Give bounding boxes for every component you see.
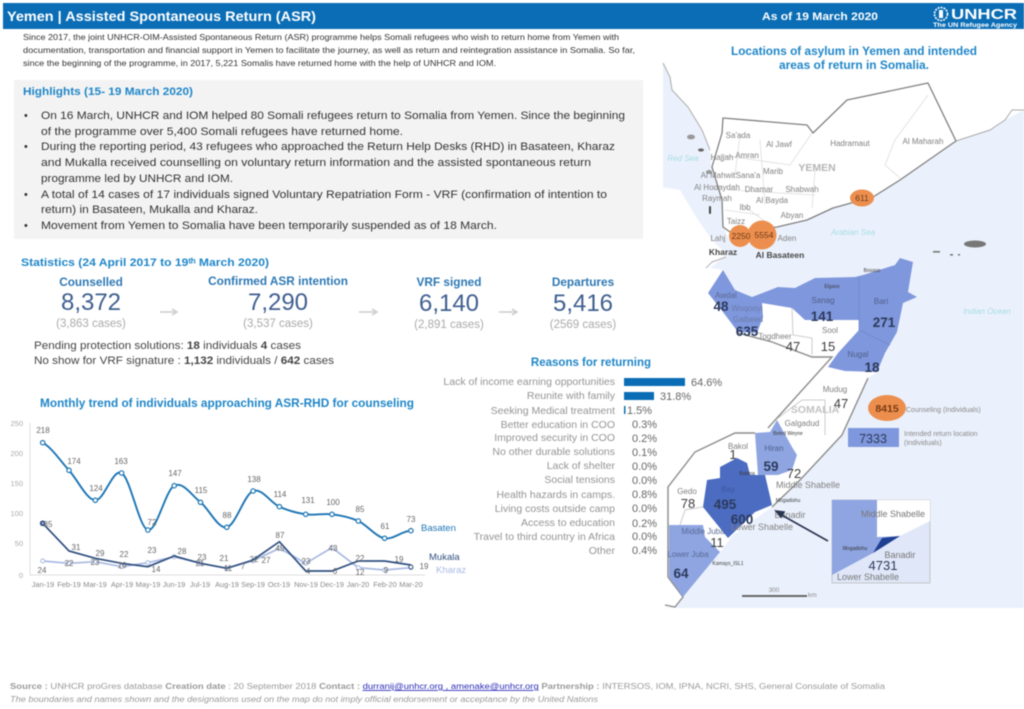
return counts: blue regions: [673, 299, 896, 581]
highlights bullets: return) in Basateen, Mukalla and Kharaz.: [41, 204, 258, 216]
chart title: Monthly trend of individuals approaching ASR-RHD for counseling: [40, 398, 414, 410]
bubble values: 5554: [755, 230, 774, 240]
small town labels: Bosaso: [864, 268, 881, 274]
data labels: 24: [38, 566, 47, 575]
Somalia labels: Sool: [822, 326, 838, 335]
reason labels: Living costs outside camp: [495, 503, 615, 515]
stat: counselled: 8,372: [61, 289, 121, 316]
title: Yemen | Assisted Spontaneous Return (ASR): [7, 8, 316, 24]
y axis labels: [10, 419, 23, 580]
data labels: 11: [224, 564, 233, 573]
data labels: 23: [148, 546, 157, 555]
percentage values: 0.0%: [632, 531, 657, 543]
intro paragraph: since the beginning of the programme, in 2017, 5,221 Somalis have returned home with the help of UNHCR and IOM.: [23, 58, 496, 68]
small town labels: Baidoa: [739, 471, 755, 477]
percentage values: [627, 377, 722, 557]
sea labels: [667, 154, 1011, 316]
x axis labels: Jun-19: [163, 580, 185, 589]
Yemen outline: [712, 83, 956, 232]
scale bar: 300: [769, 587, 780, 594]
data labels: 85: [44, 520, 53, 529]
return counts: blue regions: 271: [873, 315, 896, 330]
pending and no-show notes: Pending protection solutions: 18 individuals 4 cases: [34, 340, 302, 352]
stat: confirmed ASR intention: (3,537 cases): [243, 318, 313, 330]
map legend: (Individuals): [904, 440, 942, 447]
highlights bullets: and Mukalla received counselling on voluntary return information and the assisted spontaneous return: [41, 157, 591, 169]
data labels: 29: [96, 549, 105, 558]
UNHCR logo: UNHCR: [951, 6, 1017, 23]
Yemen labels: Abyan: [781, 211, 803, 220]
scale bar: [742, 587, 817, 599]
x axis labels: Jan-20: [347, 580, 369, 589]
return counts: blue regions: 48: [713, 299, 729, 314]
data labels: 21: [220, 554, 229, 563]
series labels: [421, 523, 466, 576]
highlights heading: Highlights (15- 19 March 2020): [23, 86, 193, 98]
statistics heading: Statistics (24 April 2017 to 19ᵗʰ March 2020): [21, 257, 269, 269]
bubble values: 2250: [732, 231, 751, 241]
small town labels: Elgavo: [824, 284, 840, 290]
Somalia labels: Hiran: [764, 444, 784, 453]
Yemen labels: Taizz: [727, 217, 745, 226]
stat: VRF signed: [414, 275, 484, 331]
data labels: 124: [89, 484, 103, 493]
Somalia labels: Lower Shabelle: [731, 522, 793, 532]
reason labels: Access to education: [521, 517, 615, 529]
Yemen labels: Aden: [778, 234, 796, 243]
stat: departures: (2569 cases): [550, 319, 616, 331]
Gulf islands: [933, 240, 986, 256]
data labels: 9: [384, 566, 389, 575]
map title: Locations of asylum in Yemen and intended: [731, 46, 977, 58]
return counts: white regions: 78: [681, 496, 695, 511]
Yemen labels: Shabwah: [785, 185, 819, 194]
reason labels: No other durable solutions: [492, 446, 615, 458]
highlights bullets: programme led by UNHCR and IOM.: [41, 173, 233, 185]
data labels: 6: [333, 567, 338, 576]
y axis labels: 150: [10, 479, 23, 488]
Somalia labels: Lower Juba: [667, 550, 709, 559]
Yemen labels: Al Jawf: [766, 140, 793, 149]
data labels: 87: [276, 531, 285, 540]
Somalia labels: Awdal: [715, 291, 737, 300]
line chart: monthly trend: [10, 398, 466, 589]
map legend: 7333: [859, 432, 887, 446]
Yemen labels: Sana'a: [736, 171, 761, 180]
Red Sea islands: [687, 134, 712, 214]
Yemen labels: Hadramaut: [830, 139, 871, 148]
bubble values: [732, 193, 869, 241]
Somalia white regions outline: [665, 333, 868, 607]
asylum place names: Kharaz: [709, 247, 737, 257]
return counts: blue regions: 495: [714, 497, 737, 512]
data labels: 14: [152, 565, 161, 574]
asylum place names: [709, 247, 804, 260]
percentage values: 0.2%: [632, 518, 657, 530]
percentage values: 0.2%: [632, 433, 657, 445]
scale bar: km: [808, 592, 817, 599]
inset: Mogadishu and Banadir: Banadir: [884, 550, 916, 560]
reason labels: Reunite with family: [527, 390, 616, 402]
highlights bullets: •: [24, 110, 28, 122]
data labels: 22: [120, 550, 129, 559]
x axis labels: [32, 580, 423, 589]
stat: counselled: Counselled: [59, 275, 123, 289]
y axis labels: 0: [19, 571, 23, 580]
data labels: 22: [65, 559, 74, 568]
inset arrow: [776, 511, 828, 541]
percentage values: 0.1%: [632, 447, 657, 459]
Somalia labels: Galbeed: [733, 315, 763, 324]
Yemen labels: Sa'ada: [726, 131, 751, 140]
stat: departures: [550, 275, 616, 331]
highlights bullets: A total of 14 cases of 17 individuals signed Voluntary Repatriation Form - VRF (confirmation of intention to: [41, 189, 607, 201]
stat: confirmed ASR intention: 7,290: [248, 289, 308, 316]
data labels: [36, 426, 429, 577]
data labels: 16: [118, 561, 127, 570]
reason labels: Lack of income earning opportunities: [443, 376, 615, 388]
intended areas: Hiran: [755, 420, 797, 475]
Yemen labels: Dhamar: [745, 185, 774, 194]
data labels: 147: [168, 469, 182, 478]
reason labels: Better education in COO: [501, 419, 615, 431]
data labels: 19: [420, 562, 429, 571]
asylum place names: Al Basateen: [756, 250, 804, 260]
map legend: Intended return location: [904, 431, 978, 438]
Yemen labels: Marib: [763, 167, 784, 176]
reason labels: Travel to third country in Africa: [474, 531, 615, 543]
return counts: blue regions: 600: [731, 512, 753, 527]
data labels: 22: [356, 554, 365, 563]
sea labels: Red Sea: [667, 154, 699, 163]
percentage values: 0.8%: [632, 489, 657, 501]
data labels: 174: [67, 457, 81, 466]
data labels: 163: [114, 457, 128, 466]
return counts: white regions: 11: [710, 535, 724, 550]
x axis labels: Apr-19: [111, 580, 133, 589]
pending and no-show notes: No show for VRF signature : 1,132 individuals / 642 cases: [34, 355, 335, 367]
return counts: blue regions: 59: [763, 459, 779, 474]
Yemen labels: Ibb: [739, 203, 751, 212]
percentage values: 0.0%: [632, 461, 657, 473]
Somalia labels: Sanag: [811, 296, 835, 305]
highlights bullets: •: [24, 189, 28, 201]
Somalia labels: Middle Juba: [681, 527, 725, 536]
highlights bullets: •: [24, 141, 28, 153]
Somalia labels: Middle Shabelle: [776, 480, 840, 490]
inset: Mogadishu and Banadir: 4731: [869, 558, 897, 573]
data labels: 100: [326, 498, 340, 507]
UNHCR logo: The UN Refugee Agency: [933, 22, 1017, 29]
data labels: 22: [250, 555, 259, 564]
return counts: blue regions: 141: [811, 309, 834, 324]
Somalia labels: Bari: [874, 297, 888, 306]
Somalia labels: Galgadud: [785, 419, 819, 428]
Yemen labels: Lahj: [710, 234, 726, 243]
y axis labels: 200: [10, 449, 23, 458]
intended areas: Bay and Lower Shabelle: [703, 458, 772, 538]
data labels: 23: [91, 558, 100, 567]
map: Yemen and Somalia: [655, 40, 1024, 608]
Somalia internal light borders: [680, 308, 825, 525]
Yemen labels: YEMEN: [798, 162, 836, 174]
intro paragraph: Since 2017, the joint UNHCR-OIM-Assisted Spontaneous Return (ASR) programme helps Somali refugees who wish to return home from Yemen with: [23, 32, 619, 42]
return counts: white regions: 15: [821, 339, 835, 354]
percentage values: 64.6%: [691, 377, 722, 389]
reason labels: Seeking Medical treatment: [491, 405, 615, 417]
reason labels: [443, 376, 616, 557]
data labels: 138: [247, 475, 261, 484]
stat: VRF signed: VRF signed: [417, 275, 481, 289]
reason labels: Improved security in COO: [494, 432, 615, 444]
Somalia labels: Togdheer: [758, 332, 792, 341]
x axis labels: Jan-19: [32, 580, 54, 589]
return counts: blue regions: 635: [736, 324, 759, 339]
x axis labels: Jul-19: [190, 580, 210, 589]
Arabian land: [655, 40, 1024, 240]
UNHCR logo: [933, 6, 1017, 29]
percentage values: 0.3%: [632, 419, 657, 431]
percentage values: 31.8%: [660, 391, 691, 403]
map title: [731, 46, 977, 72]
map legend: Counseling (Individuals): [906, 407, 981, 414]
bar chart: reasons for returning: [443, 357, 722, 557]
percentage values: 1.5%: [627, 405, 652, 417]
arrow: [160, 309, 177, 315]
stat: confirmed ASR intention: [208, 274, 348, 330]
Yemen labels: Al Bayda: [756, 196, 789, 205]
series labels: Kharaz: [436, 565, 466, 576]
bars: [624, 378, 685, 414]
Somalia labels: Mudug: [823, 385, 847, 394]
Somalia labels: Nugal: [848, 350, 869, 359]
asylum bubbles: [729, 190, 874, 250]
map legend: 8415: [875, 403, 899, 415]
highlights bullets: During the reporting period, 43 refugees who approached the Return Help Desks (RHD) in Basateen, Kharaz: [41, 141, 615, 153]
x axis labels: May-19: [136, 580, 160, 589]
map legend: [848, 395, 981, 447]
data labels: 31: [72, 543, 81, 552]
x axis labels: Feb-20: [373, 580, 397, 589]
x axis labels: Mar-19: [83, 580, 107, 589]
disclaimer: The boundaries and names shown and the designations used on the map do not imply official endorsement or acceptance by the United Nations: [10, 694, 599, 704]
highlights bullets: On 16 March, UNHCR and IOM helped 80 Somali refugees return to Somalia from Yemen. Since the beginning: [41, 110, 625, 122]
reason labels: Other: [589, 545, 615, 557]
reason labels: Social tensions: [544, 474, 615, 486]
bar chart title: Reasons for returning: [531, 357, 651, 369]
return counts: blue regions: 64: [673, 566, 689, 581]
Somalia labels: [667, 291, 888, 559]
data labels: 131: [301, 496, 315, 505]
stat: departures: 5,416: [553, 290, 613, 317]
panel: statistics: [21, 257, 616, 367]
data labels: 45: [276, 544, 285, 553]
highlights bullets: •: [24, 220, 28, 232]
x axis labels: Mar-20: [399, 580, 423, 589]
panel: highlights: [14, 80, 643, 239]
x axis labels: Aug-19: [215, 580, 239, 589]
stat: confirmed ASR intention: Confirmed ASR intention: [208, 274, 348, 288]
data labels: 85: [356, 505, 365, 514]
return counts: white regions: 72: [787, 466, 801, 481]
y axis labels: 100: [10, 509, 23, 518]
intro paragraph: documentation, transportation and financial support in Yemen to facilitate the journey, as well as return and reintegration assistance in Somalia. So far,: [23, 45, 635, 55]
series labels: Basaten: [421, 523, 456, 534]
stat: VRF signed: (2,891 cases): [414, 319, 484, 331]
data labels: 7: [241, 562, 246, 571]
data labels: 23: [198, 553, 207, 562]
report date: As of 19 March 2020: [762, 11, 878, 23]
Yemen labels: [694, 131, 943, 243]
highlights bullets: of the programme over 5,400 Somali refugees have returned home.: [41, 126, 403, 138]
Somalia labels: SOMALIA: [791, 404, 840, 416]
data labels: 43: [329, 544, 338, 553]
sea labels: Arabian Sea: [830, 228, 876, 237]
data labels: 12: [356, 568, 365, 577]
inset: Mogadishu and Banadir: Lower Shabelle: [837, 572, 899, 582]
Yemen labels: Al Maharah: [903, 137, 943, 146]
data labels: 4: [306, 567, 311, 576]
data labels: 21: [196, 559, 205, 568]
y axis labels: 250: [10, 419, 23, 428]
Somalia labels: Woqooyi: [732, 304, 763, 313]
header bar: [3, 3, 1024, 29]
inset: Mogadishu and Banadir: Mogadishu: [843, 546, 867, 552]
x axis labels: Sep-19: [241, 580, 265, 589]
intended areas: Lower Juba: [669, 525, 720, 597]
data labels: 114: [274, 490, 287, 499]
arrow: [359, 309, 377, 315]
series: Basateen: [40, 440, 413, 540]
series: Mukalla: [41, 521, 413, 571]
Djibouti stroke: [706, 257, 726, 268]
data labels: 73: [407, 515, 416, 524]
map title: areas of return in Somalia.: [779, 60, 929, 72]
data labels: 115: [195, 486, 208, 495]
return counts: white regions: 1: [729, 447, 737, 462]
Somalia labels: Bakol: [728, 442, 748, 451]
percentage values: 0.4%: [632, 545, 657, 557]
Yemen labels: Al Hodaydah: [694, 183, 740, 192]
y axis labels: 50: [15, 539, 23, 548]
African land: [655, 186, 917, 608]
Somalia labels: Bay: [721, 485, 735, 494]
Yemen labels: Amran: [735, 151, 759, 160]
data labels: 61: [381, 522, 390, 531]
return counts: blue regions: 18: [864, 360, 880, 375]
Yemen labels: Al Mahwit: [701, 171, 736, 180]
inset: Mogadishu and Banadir: [832, 500, 930, 583]
Yemen labels: Hajjah: [711, 153, 733, 162]
x axis labels: Feb-19: [57, 580, 81, 589]
return counts: white regions: 47: [834, 396, 848, 411]
stat: departures: Departures: [552, 275, 615, 289]
footer: [10, 681, 885, 704]
reason labels: Lack of shelter: [547, 460, 615, 472]
data labels: 72: [148, 518, 157, 527]
small town labels: Mogadishu: [776, 498, 800, 504]
sea background: [663, 60, 1024, 608]
reason labels: Health hazards in camps.: [497, 489, 615, 501]
data labels: 28: [178, 547, 187, 556]
pending and no-show notes: [34, 340, 335, 367]
return counts: white regions: [681, 339, 848, 550]
inset: Mogadishu and Banadir: Middle Shabelle: [861, 509, 925, 519]
intended areas: northern regions: [708, 258, 917, 372]
small town labels: Beled Weyne: [773, 431, 803, 437]
stat: VRF signed: 6,140: [419, 290, 479, 317]
small town labels: [712, 268, 881, 567]
data labels: 23: [302, 557, 311, 566]
arrow: [499, 309, 517, 315]
data labels: 88: [223, 511, 232, 520]
series labels: Mukala: [429, 552, 460, 563]
data labels: 19: [395, 555, 404, 564]
highlights bullets: Movement from Yemen to Somalia have been temporarily suspended as of 18 March.: [41, 220, 497, 232]
data labels: 218: [36, 426, 50, 435]
Yemen labels: Raymah: [702, 194, 732, 203]
intro paragraph: [23, 32, 635, 68]
sea labels: Indian Ocean: [963, 307, 1011, 316]
percentage values: 0.0%: [632, 475, 657, 487]
x axis labels: Oct-19: [268, 580, 290, 589]
series: Kharaz: [41, 546, 413, 572]
Somalia labels: Gedo: [677, 487, 697, 496]
data labels: 27: [262, 556, 271, 565]
footer: Source : UNHCR proGres database Creation date : 20 September 2018 Contact : durranij@unhcr.org , amenake@unhcr.org Partnership : INTERSOS, IOM, IPNA, NCRI, SHS, General Consulate of Somalia: [10, 681, 885, 691]
small town labels: Kamays_ISL1: [712, 561, 744, 567]
highlights bullets: [24, 110, 625, 232]
return counts: white regions: 47: [786, 339, 800, 354]
percentage values: 0.0%: [632, 503, 657, 515]
stat: counselled: [56, 275, 126, 330]
Somalia labels: Banadir: [774, 510, 806, 520]
bubble values: 611: [855, 193, 869, 203]
x axis labels: Dec-19: [320, 580, 344, 589]
x axis labels: Nov-19: [294, 580, 318, 589]
stat: counselled: (3,863 cases): [56, 318, 126, 330]
